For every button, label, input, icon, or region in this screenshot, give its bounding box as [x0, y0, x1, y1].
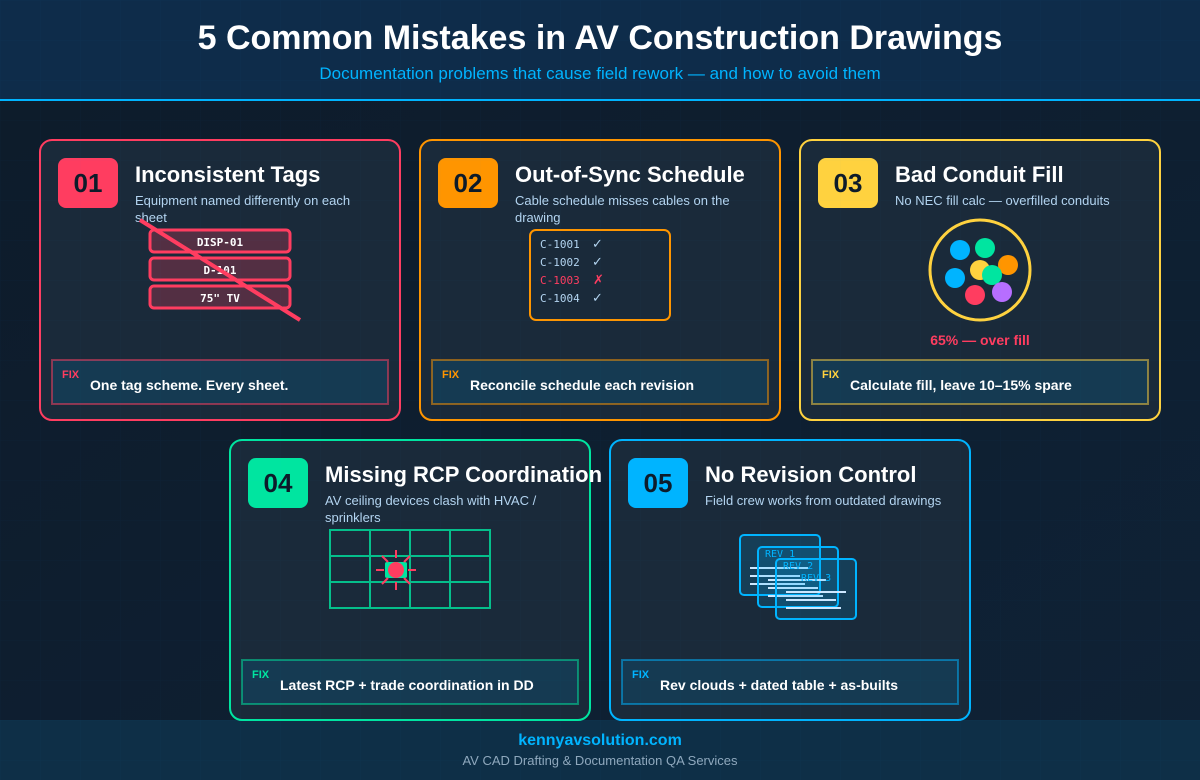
badge 03: [818, 158, 878, 208]
description: Field crew works from outdated drawings: [705, 493, 942, 508]
panel: 05 no revision control: [610, 440, 970, 720]
fix callout: [242, 660, 578, 704]
panel: 02 out-of-sync schedule: [420, 140, 780, 420]
fix callout: FIX: [632, 669, 650, 681]
stacked revision sheets: REV 3: [801, 573, 831, 584]
tag stack illustration: D-101: [203, 264, 237, 277]
badge 05: [628, 458, 688, 508]
fix callout: [812, 360, 1148, 404]
ceiling grid clash: [330, 530, 490, 608]
subtitle: Documentation problems that cause field rework — and how to avoid them: [319, 64, 881, 83]
cable schedule table: C-1001: [540, 238, 580, 251]
fix callout: FIX: [822, 369, 840, 381]
cable schedule table: ✓: [592, 291, 603, 306]
badge 01: [58, 158, 118, 208]
badge 02: 02: [454, 168, 482, 198]
heading: Out-of-Sync Schedule: [515, 162, 745, 187]
badge 03: 03: [834, 168, 862, 198]
stacked revision sheets: REV 1: [765, 549, 795, 560]
fix callout: [52, 360, 388, 404]
fix callout: FIX: [442, 369, 460, 381]
cable schedule table: C-1003: [540, 274, 580, 287]
cable schedule table: ✓: [592, 255, 603, 270]
title: 5 Common Mistakes in AV Construction Drawings: [198, 19, 1002, 57]
description: Cable schedule misses cables on the: [515, 193, 730, 208]
footer tagline: AV CAD Drafting & Documentation QA Services: [462, 753, 738, 768]
badge 02: [438, 158, 498, 208]
badge 01: 01: [74, 168, 102, 198]
fix callout: FIX: [252, 669, 270, 681]
cable schedule table: [530, 230, 670, 320]
badge 04: [248, 458, 308, 508]
heading: Missing RCP Coordination: [325, 462, 602, 487]
panel: 03 bad conduit fill: [800, 140, 1160, 420]
conduit cross-section: [930, 220, 1030, 320]
description: sprinklers: [325, 510, 381, 525]
badge 04: 04: [264, 468, 293, 498]
fill warning: 65% — over fill: [930, 332, 1030, 348]
description: sheet: [135, 210, 167, 225]
header band: [0, 0, 1200, 101]
description: drawing: [515, 210, 561, 225]
description: Equipment named differently on each: [135, 193, 350, 208]
description: No NEC fill calc — overfilled conduits: [895, 193, 1110, 208]
stacked revision sheets: [740, 535, 856, 619]
fix callout: [622, 660, 958, 704]
fix callout: Reconcile schedule each revision: [470, 377, 694, 393]
fix callout: [432, 360, 768, 404]
description: AV ceiling devices clash with HVAC /: [325, 493, 536, 508]
fix callout: One tag scheme. Every sheet.: [90, 377, 288, 393]
cable schedule table: C-1002: [540, 256, 580, 269]
tag stack illustration: [140, 220, 300, 320]
stacked revision sheets: REV 2: [783, 561, 813, 572]
heading: Inconsistent Tags: [135, 162, 320, 187]
heading: No Revision Control: [705, 462, 916, 487]
tag stack illustration: DISP-01: [197, 236, 244, 249]
fix callout: Calculate fill, leave 10–15% spare: [850, 377, 1072, 393]
cable schedule table: ✗: [593, 273, 604, 288]
cable schedule table: ✓: [592, 237, 603, 252]
fix callout: FIX: [62, 369, 80, 381]
cable schedule table: C-1004: [540, 292, 580, 305]
footer website: kennyavsolution.com: [518, 732, 682, 749]
heading: Bad Conduit Fill: [895, 162, 1064, 187]
tag stack illustration: 75" TV: [200, 292, 240, 305]
fix callout: Latest RCP + trade coordination in DD: [280, 677, 534, 693]
fix callout: Rev clouds + dated table + as-builts: [660, 677, 898, 693]
footer band: [0, 720, 1200, 780]
panel: 04 missing RCP coordination: [230, 440, 602, 720]
panel: 01 inconsistent tags: [40, 140, 400, 420]
badge 05: 05: [644, 468, 672, 498]
